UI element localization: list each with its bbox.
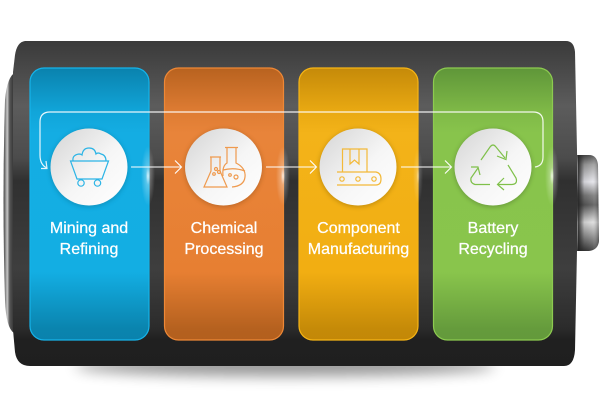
label: Component Manufacturing: Component	[317, 220, 400, 237]
panel: Component Manufacturing	[299, 68, 423, 340]
circle: component	[319, 128, 397, 207]
panel: Battery Recycling	[434, 68, 559, 340]
circle: mining	[50, 128, 128, 207]
battery terminal	[576, 155, 599, 251]
label: Component Manufacturing	[308, 220, 409, 258]
flow arrow 3	[401, 160, 452, 174]
icon: mine cart	[70, 148, 108, 186]
circle: recycling	[454, 128, 532, 207]
panel: Mining and Refining	[30, 68, 155, 340]
panel glow	[413, 148, 423, 204]
loop arrow	[40, 112, 543, 168]
label: Battery Recycling	[458, 220, 528, 258]
label: Mining and Refining: Refining	[60, 241, 118, 258]
left battery end cap	[4, 72, 16, 333]
panel glow	[141, 146, 155, 206]
icon: conveyor box	[337, 149, 381, 185]
icon: recycling triangle	[471, 145, 516, 190]
label: Mining and Refining	[50, 220, 128, 258]
label: Chemical Processing: Processing	[184, 241, 264, 258]
flow arrow 1	[131, 160, 182, 174]
panel glow	[545, 146, 559, 206]
label: Chemical Processing	[184, 220, 264, 258]
ground shadow	[75, 356, 495, 376]
panel: Chemical Processing	[164, 68, 290, 340]
label: Mining and Refining: Mining and	[50, 220, 128, 237]
flow arrow 2	[266, 160, 316, 174]
label: Battery Recycling: Recycling	[458, 241, 528, 258]
label: Battery Recycling: Battery	[468, 220, 518, 237]
icon: flasks	[204, 148, 245, 187]
panel glow	[276, 146, 290, 206]
battery body	[13, 41, 578, 366]
circle: chemical	[184, 128, 262, 207]
label: Component Manufacturing: Manufacturing	[308, 241, 409, 258]
label: Chemical Processing: Chemical	[191, 220, 257, 237]
